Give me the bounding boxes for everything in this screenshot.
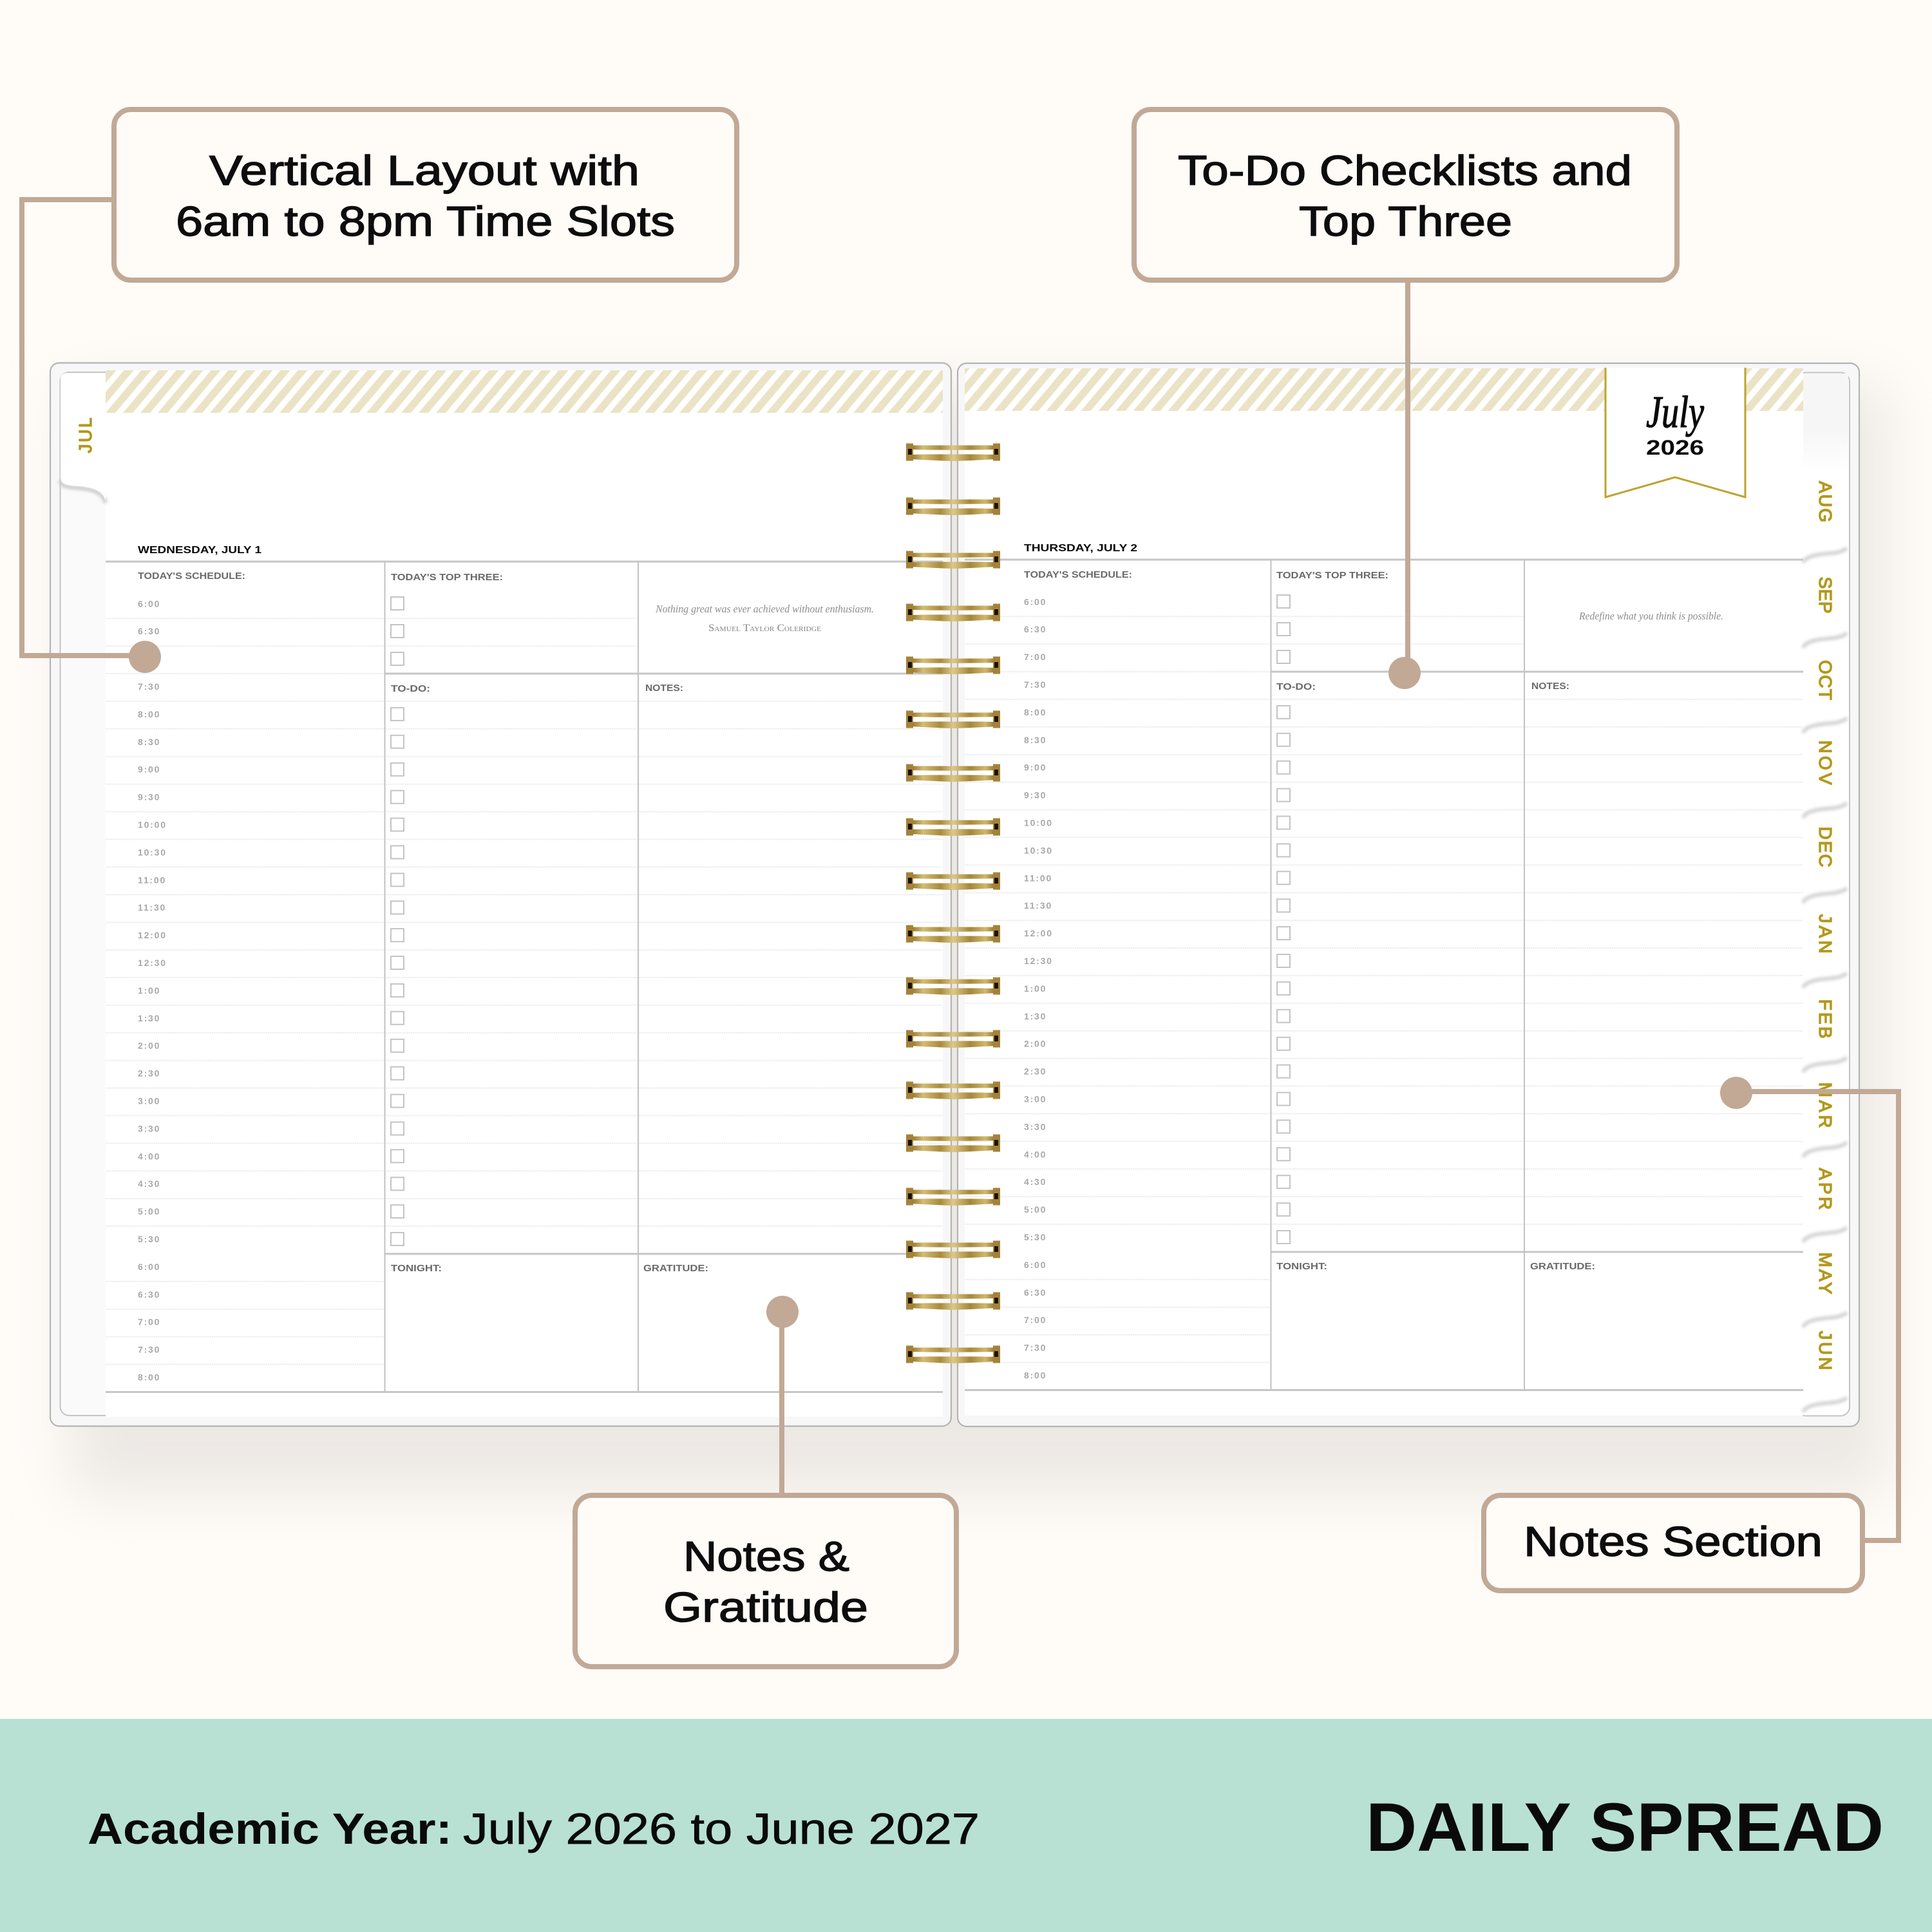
left time slots: 12:00 bbox=[138, 930, 167, 940]
right time slots: 2:00 bbox=[1024, 1039, 1046, 1049]
callout: vertical layout: 6am to 8pm Time Slots bbox=[176, 198, 675, 245]
left time slots bbox=[138, 598, 167, 1382]
left labels: NOTES: bbox=[645, 683, 683, 694]
left time slots: 8:00 bbox=[138, 709, 160, 719]
right labels: TONIGHT: bbox=[1276, 1262, 1327, 1272]
right time slots: 3:30 bbox=[1024, 1121, 1046, 1132]
month ribbon: July 2026: 2026 bbox=[1646, 436, 1704, 459]
right month tabs bbox=[1815, 481, 1835, 1370]
title: daily spread: DAILY SPREAD bbox=[1366, 1788, 1884, 1866]
callout: vertical layout: Vertical Layout with bbox=[209, 147, 639, 194]
left time slots: 8:00 bbox=[138, 1372, 160, 1382]
callout: notes and gratitude: Gratitude bbox=[663, 1584, 868, 1631]
callout: notes and gratitude: Notes & bbox=[683, 1533, 849, 1580]
right month tabs: JUN bbox=[1815, 1331, 1835, 1370]
right labels: TODAY'S TOP THREE: bbox=[1276, 571, 1388, 581]
right time slots: 4:00 bbox=[1024, 1149, 1046, 1159]
right time slots: 7:00 bbox=[1024, 652, 1046, 662]
panel: left page bbox=[50, 363, 975, 1426]
right labels: TODAY'S SCHEDULE: bbox=[1024, 570, 1132, 580]
callout: to-do checklists: To-Do Checklists and bbox=[1178, 147, 1632, 194]
connector: vertical layout bbox=[22, 200, 161, 673]
right time slots: 5:30 bbox=[1024, 1232, 1046, 1242]
left time slots: 7:00 bbox=[138, 654, 160, 664]
right time slots: 11:00 bbox=[1024, 873, 1052, 883]
right month tabs: NOV bbox=[1815, 741, 1835, 785]
left page sheet bbox=[106, 370, 943, 1417]
left labels: GRATITUDE: bbox=[643, 1264, 708, 1274]
right time slots: 1:30 bbox=[1024, 1011, 1046, 1021]
left time slots: 6:30 bbox=[138, 1289, 160, 1300]
left quote: Samuel Taylor Coleridge bbox=[708, 623, 821, 634]
right time slots: 7:30 bbox=[1024, 679, 1046, 690]
right labels: TO-DO: bbox=[1276, 682, 1316, 692]
right tab dividers bbox=[1803, 548, 1847, 1412]
spiral binding bbox=[906, 443, 1000, 1363]
left time slots: 3:00 bbox=[138, 1096, 160, 1106]
callout: notes and gratitude bbox=[575, 1495, 956, 1667]
right time slots: 7:00 bbox=[1024, 1315, 1046, 1325]
connector: to-do bbox=[1388, 281, 1421, 689]
left time slots: 10:00 bbox=[138, 819, 167, 829]
left time slots: 6:30 bbox=[138, 626, 160, 636]
right quote: Redefine what you think is possible. bbox=[1578, 610, 1723, 622]
left labels: TONIGHT: bbox=[391, 1264, 442, 1274]
right month tabs: JAN bbox=[1815, 914, 1835, 953]
panel: right page bbox=[958, 363, 1859, 1426]
right time slots: 11:30 bbox=[1024, 900, 1052, 911]
left time slots: 6:00 bbox=[138, 1262, 160, 1272]
left quote bbox=[655, 603, 874, 634]
footer band bbox=[0, 1719, 1932, 1932]
right tab column bbox=[1797, 372, 1850, 1416]
right labels bbox=[1024, 570, 1595, 1272]
right time slots: 6:30 bbox=[1024, 1287, 1046, 1298]
left time slots: 5:30 bbox=[138, 1234, 160, 1244]
left time slots: 4:30 bbox=[138, 1179, 160, 1189]
right stripe band bbox=[965, 368, 1803, 411]
left time slots: 11:30 bbox=[138, 902, 166, 913]
right month tabs: DEC bbox=[1815, 827, 1835, 867]
right time slots: 9:00 bbox=[1024, 762, 1046, 773]
callout: to-do checklists: Top Three bbox=[1299, 198, 1512, 245]
planner spread bbox=[50, 363, 1859, 1426]
right time slots bbox=[1024, 596, 1053, 1380]
left time slots: 2:00 bbox=[138, 1041, 160, 1051]
left time slots: 4:00 bbox=[138, 1151, 160, 1161]
right time slots: 8:00 bbox=[1024, 707, 1046, 717]
planner shadow bbox=[71, 386, 1887, 1494]
right labels: GRATITUDE: bbox=[1530, 1262, 1595, 1272]
left time slots: 9:30 bbox=[138, 792, 160, 802]
left cover bbox=[50, 363, 951, 1426]
left time slots: 2:30 bbox=[138, 1068, 160, 1079]
right time slots: 8:00 bbox=[1024, 1370, 1046, 1381]
callout: to-do checklists bbox=[1134, 109, 1677, 280]
right time slots: 4:30 bbox=[1024, 1177, 1046, 1187]
left time slots: 1:30 bbox=[138, 1013, 160, 1023]
right day heading: THURSDAY, JULY 2 bbox=[1024, 543, 1137, 554]
left time slots: 11:00 bbox=[138, 875, 166, 885]
left quote: Nothing great was ever achieved without enthusiasm. bbox=[655, 603, 874, 615]
left time slots: 12:30 bbox=[138, 958, 167, 968]
left time slots: 9:00 bbox=[138, 764, 160, 775]
right month tabs: FEB bbox=[1815, 999, 1835, 1038]
right month tabs: MAR bbox=[1815, 1082, 1835, 1128]
right month tabs: AUG bbox=[1815, 481, 1835, 522]
left labels: TODAY'S SCHEDULE: bbox=[138, 571, 245, 582]
right planner grid bbox=[965, 560, 1829, 1390]
left divider liner bbox=[59, 372, 106, 1416]
right time slots: 8:30 bbox=[1024, 735, 1046, 745]
right time slots: 9:30 bbox=[1024, 790, 1046, 800]
right time slots: 2:30 bbox=[1024, 1066, 1046, 1077]
left tab JUL bbox=[60, 373, 106, 503]
right time slots: 3:00 bbox=[1024, 1094, 1046, 1104]
right month tabs: SEP bbox=[1815, 577, 1835, 613]
callout: notes section bbox=[1484, 1495, 1862, 1591]
left time slots: 6:00 bbox=[138, 598, 160, 609]
left labels: TODAY'S TOP THREE: bbox=[391, 573, 503, 583]
right month tabs: OCT bbox=[1815, 660, 1835, 700]
academic year text: Academic Year: bbox=[88, 1804, 452, 1853]
month ribbon: July 2026 bbox=[1605, 368, 1745, 497]
month ribbon: July 2026: July bbox=[1646, 388, 1705, 437]
right time slots: 7:30 bbox=[1024, 1343, 1046, 1353]
academic year text: July 2026 to June 2027 bbox=[463, 1804, 980, 1853]
right time slots: 12:00 bbox=[1024, 928, 1053, 938]
right time slots: 6:00 bbox=[1024, 596, 1046, 607]
left time slots: 1:00 bbox=[138, 985, 160, 996]
right cover bbox=[958, 363, 1859, 1426]
right time slots: 12:30 bbox=[1024, 956, 1053, 966]
left tab JUL: JUL bbox=[75, 417, 95, 453]
left stripe band bbox=[106, 370, 943, 413]
left labels bbox=[138, 571, 708, 1274]
right month tabs: MAY bbox=[1815, 1252, 1835, 1294]
right time slots: 6:00 bbox=[1024, 1260, 1046, 1270]
callout: vertical layout bbox=[114, 109, 737, 280]
right time slots: 10:00 bbox=[1024, 818, 1053, 828]
left labels: TO-DO: bbox=[391, 684, 430, 694]
left time slots: 3:30 bbox=[138, 1123, 160, 1133]
left time slots: 10:30 bbox=[138, 847, 167, 857]
right page sheet bbox=[965, 368, 1803, 1416]
left time slots: 8:30 bbox=[138, 737, 160, 747]
left planner grid bbox=[79, 562, 943, 1392]
connector: notes section bbox=[1720, 1077, 1899, 1540]
right time slots: 5:00 bbox=[1024, 1204, 1046, 1215]
right time slots: 1:00 bbox=[1024, 983, 1046, 994]
left time slots: 7:30 bbox=[138, 681, 160, 692]
left day heading: WEDNESDAY, JULY 1 bbox=[138, 545, 261, 556]
right time slots: 6:30 bbox=[1024, 624, 1046, 634]
right month tabs: APR bbox=[1815, 1168, 1835, 1209]
right time slots: 10:30 bbox=[1024, 845, 1053, 855]
academic year text bbox=[88, 1804, 980, 1853]
left time slots: 5:00 bbox=[138, 1206, 160, 1217]
callout: notes section: Notes Section bbox=[1524, 1518, 1823, 1565]
left time slots: 7:30 bbox=[138, 1345, 160, 1355]
right labels: NOTES: bbox=[1531, 681, 1569, 692]
connector: notes and gratitude bbox=[766, 1296, 799, 1494]
left time slots: 7:00 bbox=[138, 1317, 160, 1327]
